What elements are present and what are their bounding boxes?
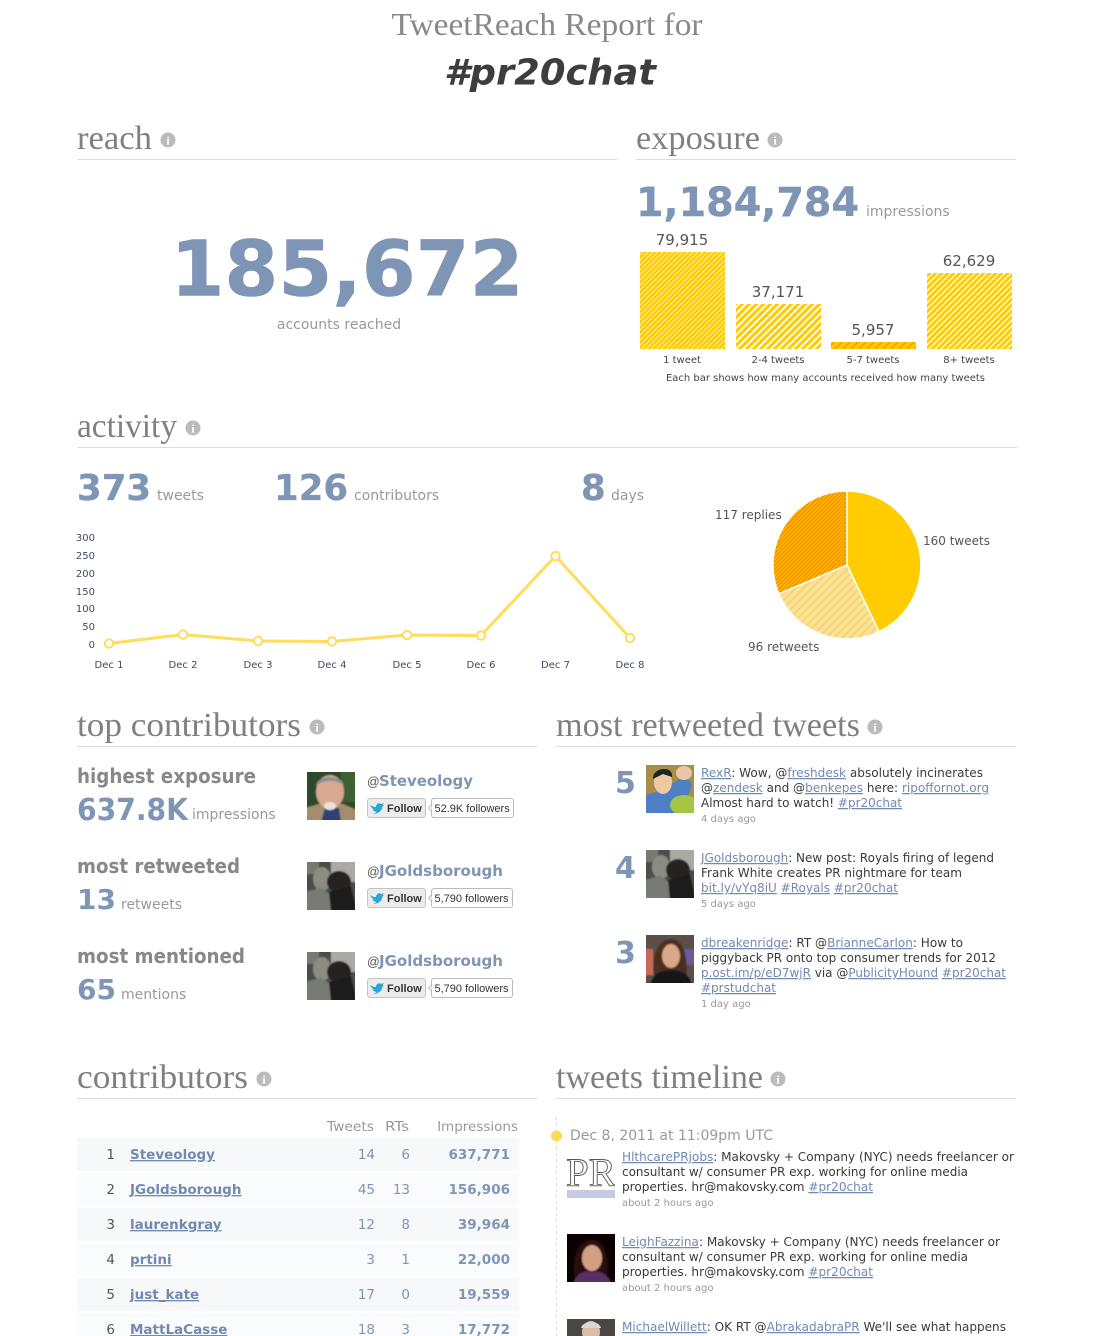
tweet: dbreakenridge (615, 933, 1006, 1010)
row: just_kate: 5 (106, 1287, 115, 1303)
row: JGoldsborough (77, 1173, 519, 1206)
row: laurenkgray: 12 (358, 1217, 375, 1233)
follow button: Follow (387, 893, 422, 905)
tweet: RexR: Almost hard to watch! #pr20chat (701, 795, 902, 810)
stat: days: days (611, 488, 644, 504)
line chart: tweets per day: 150 (76, 587, 95, 598)
table header: Tweets (326, 1119, 374, 1135)
row: Steveology: 637,771 (448, 1147, 510, 1163)
avatar: HlthcarePRjobs: PR (566, 1150, 616, 1195)
stat: days (581, 468, 644, 509)
row: Steveology: Steveology (130, 1147, 215, 1163)
bar: 2-4 tweets: 2-4 tweets (751, 355, 805, 366)
follow button: Follow (387, 803, 422, 815)
row: prtini: 3 (366, 1252, 375, 1268)
line chart: tweets per day: Dec 3 (244, 660, 272, 671)
follow button (368, 978, 512, 998)
line chart: tweets per day: Dec 1 (95, 660, 123, 671)
heading: top contributors: top contributors (77, 707, 301, 744)
heading: contributors: i (262, 1072, 266, 1086)
panel: activity (76, 408, 1017, 671)
tweet: HlthcarePRjobs (566, 1149, 1015, 1209)
row: prtini (77, 1243, 519, 1276)
title: #pr20chat (444, 52, 658, 94)
follow button: 5,790 followers (434, 893, 509, 905)
highest exposure: impressions (192, 807, 276, 823)
row: JGoldsborough: 156,906 (448, 1182, 510, 1198)
tweet: dbreakenridge: 3 (615, 936, 636, 971)
panel: most retweeted tweets (556, 707, 1016, 1010)
bar: 5-7 tweets: 5-7 tweets (846, 355, 900, 366)
row: just_kate: 0 (401, 1287, 410, 1303)
avatar: MichaelWillett (567, 1319, 615, 1336)
stat: days: 8 (581, 468, 606, 509)
most retweeted: retweets (121, 897, 182, 913)
tweet: RexR: 5 (615, 766, 636, 801)
most mentioned (77, 944, 512, 1006)
handle: JGoldsborough: JGoldsborough (378, 862, 503, 880)
line chart: tweets per day: Dec 7 (541, 660, 570, 671)
table header: Impressions (437, 1119, 518, 1135)
tweet: LeighFazzina: about 2 hours ago (622, 1283, 713, 1294)
follow button: 52.9K followers (434, 803, 510, 815)
line chart: tweets per day: 200 (76, 569, 95, 580)
bar chart caption: Each bar shows how many accounts received how many tweets (666, 373, 985, 384)
reach number: 185,672 (170, 226, 524, 314)
row: prtini: 1 (401, 1252, 410, 1268)
pie chart: tweet types: 117 replies (715, 508, 782, 522)
heading: activity: activity (77, 408, 177, 445)
row: prtini: prtini (130, 1252, 172, 1268)
most retweeted: most retweeted (77, 854, 240, 878)
impressions total: 1,184,784 (636, 180, 859, 226)
follow button (368, 798, 514, 818)
tweet: RexR: RexR: Wow, @freshdesk absolutely incinerates (701, 765, 983, 780)
panel: exposure (636, 120, 1016, 384)
follow button: 5,790 followers (434, 983, 509, 995)
line chart: tweets per day: Dec 4 (318, 660, 346, 671)
tweet: LeighFazzina: consultant w/ consumer PR exp. working for online media (622, 1249, 968, 1264)
bar: 8+ tweets (927, 252, 1012, 366)
handle: JGoldsborough: @ (367, 955, 380, 969)
line chart: tweets per day: Dec 5 (393, 660, 421, 671)
row: just_kate: just_kate (129, 1287, 199, 1303)
tweet: JGoldsborough: bit.ly/vYq8iU #Royals #pr20chat (701, 880, 898, 895)
stat: tweets: tweets (157, 488, 204, 504)
tweet: MichaelWillett: MichaelWillett: OK RT @AbrakadabraPR We'll see what happens (622, 1319, 1006, 1334)
row: JGoldsborough: 45 (358, 1182, 375, 1198)
title: TweetReach Report for (392, 6, 703, 42)
tweet: HlthcarePRjobs: about 2 hours ago (622, 1198, 713, 1209)
panel: reach (77, 120, 617, 333)
highest exposure (78, 768, 514, 822)
line chart: tweets per day: 100 (76, 604, 95, 615)
panel: tweets timeline (551, 1059, 1016, 1336)
row: laurenkgray: 39,964 (458, 1217, 510, 1233)
title (392, 6, 703, 94)
most mentioned: mentions (121, 987, 186, 1003)
tweet: RexR: @zendesk and @benkepes here: ripoffornot.org (701, 780, 989, 795)
bar: 2-4 tweets: 37,171 (752, 283, 804, 301)
tweet: HlthcarePRjobs: properties. hr@makovsky.com #pr20chat (622, 1179, 873, 1194)
tweet: dbreakenridge: dbreakenridge: RT @BrianneCarlon: How to (701, 935, 963, 950)
bar chart: accounts by tweets received (640, 231, 1012, 366)
line chart: tweets per day: 0 (89, 640, 95, 651)
tweet: LeighFazzina: LeighFazzina: Makovsky + Company (NYC) needs freelancer or (622, 1234, 1001, 1249)
avatar: dbreakenridge (646, 935, 694, 983)
row: Steveology: 1 (106, 1147, 115, 1163)
bar: 8+ tweets: 62,629 (943, 252, 995, 270)
row: prtini: 22,000 (458, 1252, 510, 1268)
stat: contributors (274, 468, 439, 509)
row: MattLaCasse (77, 1313, 519, 1336)
pie chart: tweet types: 160 tweets (923, 534, 990, 548)
most retweeted (77, 854, 512, 916)
tweet: dbreakenridge: 1 day ago (701, 999, 751, 1010)
heading: activity: i (191, 422, 195, 436)
most mentioned: most mentioned (77, 944, 245, 968)
tweet: RexR (615, 765, 989, 825)
tweet: dbreakenridge: #prstudchat (701, 980, 776, 995)
stat: tweets (77, 468, 204, 509)
tweet: dbreakenridge: p.ost.im/p/eD7wjR via @PublicityHound #pr20chat (701, 965, 1006, 980)
bar: 1 tweet: 79,915 (656, 231, 708, 249)
row: Steveology (77, 1138, 519, 1171)
tweet: HlthcarePRjobs: HlthcarePRjobs: Makovsky + Company (NYC) needs freelancer or (622, 1149, 1015, 1164)
stat: contributors: 126 (274, 468, 348, 509)
most mentioned: 65 (77, 973, 116, 1006)
pie chart: tweet types (715, 491, 990, 654)
pie chart: tweet types: 96 retweets (748, 640, 819, 654)
line chart: tweets per day (76, 533, 644, 671)
heading: exposure: exposure (636, 120, 760, 157)
row: laurenkgray: 8 (401, 1217, 410, 1233)
row: laurenkgray: 3 (106, 1217, 115, 1233)
stat: contributors: contributors (354, 488, 439, 504)
highest exposure: 637.8K (77, 793, 190, 828)
row: just_kate (77, 1278, 519, 1311)
reach caption: accounts reached (277, 317, 401, 333)
row: just_kate: 19,559 (458, 1287, 510, 1303)
line chart: tweets per day: 250 (76, 551, 95, 562)
avatar: JGoldsborough (644, 848, 696, 900)
heading: top contributors: i (315, 720, 319, 734)
heading: reach: reach (77, 120, 152, 157)
row: JGoldsborough: 2 (106, 1182, 115, 1198)
heading: most retweeted tweets: most retweeted tweets (556, 707, 860, 744)
bar: 1 tweet: 1 tweet (663, 355, 701, 366)
highest exposure: highest exposure (77, 764, 256, 788)
row: Steveology: 14 (358, 1147, 375, 1163)
tweet: dbreakenridge: piggyback PR onto top consumer trends for 2012 (701, 950, 996, 965)
line chart: tweets per day: Dec 2 (169, 660, 197, 671)
tweet: JGoldsborough: JGoldsborough: New post: Royals firing of legend (700, 850, 994, 865)
avatar: JGoldsborough (305, 950, 357, 1002)
heading: reach: i (166, 134, 170, 148)
bar: 8+ tweets: 8+ tweets (943, 355, 995, 366)
tweet: RexR: 4 days ago (701, 814, 756, 825)
line chart: tweets per day: 50 (82, 622, 95, 633)
row: Steveology: 6 (401, 1147, 410, 1163)
most retweeted: 13 (77, 883, 116, 916)
avatar: JGoldsborough (305, 860, 357, 912)
heading: exposure: i (773, 134, 777, 148)
bar: 2-4 tweets (736, 283, 821, 366)
avatar: Steveology (307, 772, 355, 820)
row: JGoldsborough: JGoldsborough (129, 1182, 241, 1198)
row: prtini: 4 (106, 1252, 115, 1268)
follow button (368, 888, 512, 908)
tweet: JGoldsborough: 4 (615, 851, 636, 886)
panel: contributors table (77, 1059, 537, 1336)
row: laurenkgray: laurenkgray (130, 1217, 222, 1233)
handle: JGoldsborough: @ (367, 865, 380, 879)
follow button: Follow (387, 983, 422, 995)
bar: 5-7 tweets: 5,957 (852, 321, 894, 339)
line chart: tweets per day: Dec 8 (616, 660, 644, 671)
table header: RTs (385, 1119, 409, 1135)
stat: tweets: 373 (77, 468, 151, 509)
row: just_kate: 17 (358, 1287, 375, 1303)
bar: 1 tweet (640, 231, 725, 366)
row: laurenkgray (77, 1208, 519, 1241)
panel: top contributors (77, 707, 537, 1006)
row: JGoldsborough: 13 (393, 1182, 410, 1198)
tweet: LeighFazzina: properties. hr@makovsky.com #pr20chat (622, 1264, 873, 1279)
bar: 5-7 tweets (831, 321, 916, 366)
line chart: tweets per day: Dec 6 (467, 660, 495, 671)
heading: most retweeted tweets: i (873, 720, 877, 734)
heading: tweets timeline: i (776, 1072, 780, 1086)
heading: tweets timeline: tweets timeline (556, 1059, 763, 1096)
impressions total: impressions (866, 204, 950, 220)
timeline date marker: Dec 8, 2011 at 11:09pm UTC (570, 1128, 773, 1144)
avatar: LeighFazzina (567, 1234, 615, 1282)
handle: Steveology: Steveology (379, 772, 473, 790)
avatar: RexR (646, 765, 694, 813)
tweet: JGoldsborough: 5 days ago (701, 899, 756, 910)
line chart: tweets per day: 300 (76, 533, 95, 544)
tweet: JGoldsborough (615, 848, 994, 910)
handle: Steveology: @ (367, 775, 380, 789)
tweet: JGoldsborough: Frank White creates PR nightmare for team (701, 865, 962, 880)
handle: JGoldsborough: JGoldsborough (378, 952, 503, 970)
tweet: LeighFazzina (565, 1232, 1001, 1294)
heading: contributors: contributors (77, 1059, 248, 1096)
table header (326, 1119, 518, 1135)
tweet: HlthcarePRjobs: consultant w/ consumer PR exp. working for online media (622, 1164, 968, 1179)
